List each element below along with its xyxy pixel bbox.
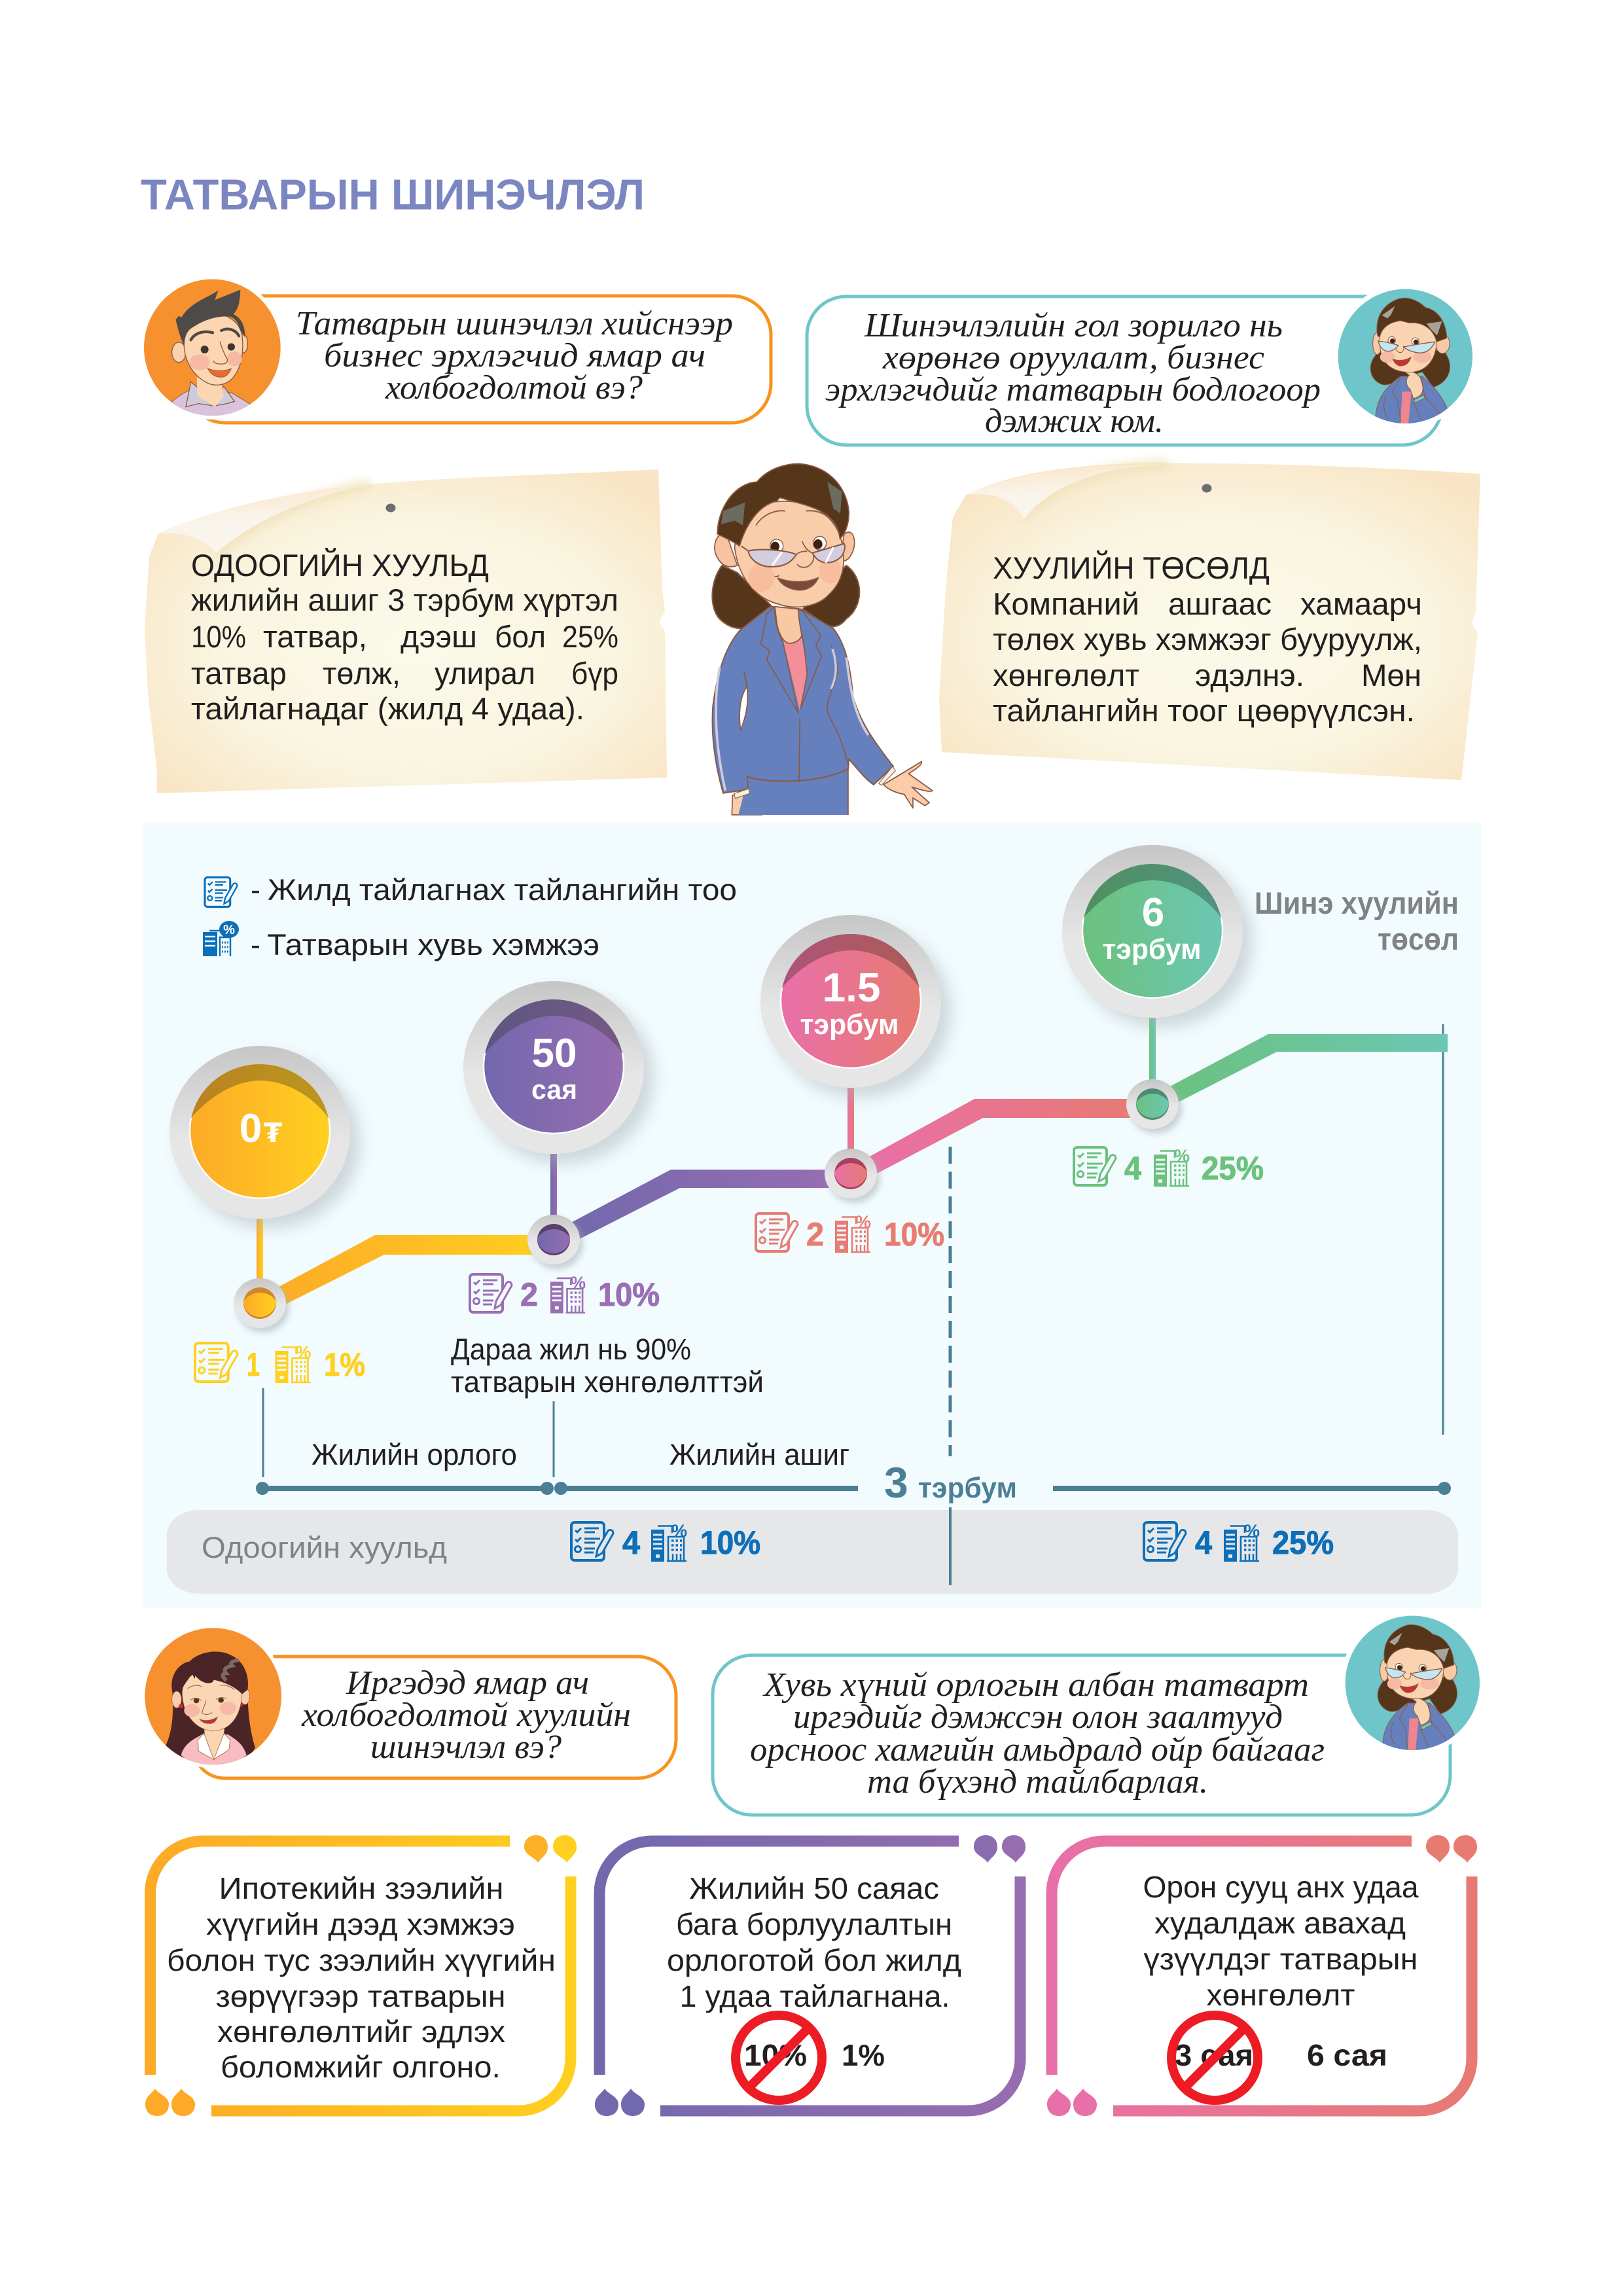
stats: current law left bbox=[571, 1521, 760, 1562]
panel: bill proposal note: Мөн bbox=[1361, 658, 1421, 692]
node: 1.5 billion: 1.5 bbox=[822, 965, 881, 1011]
node: 0 tugrik: 0 bbox=[240, 1106, 262, 1151]
bubble text: Шинэчлэлийн гол зорилго нь bbox=[864, 307, 1283, 344]
axis labels bbox=[312, 1438, 1017, 1507]
bubble text: бизнес эрхлэгчид ямар ач bbox=[324, 337, 705, 374]
stats: green: 4 bbox=[1124, 1150, 1141, 1187]
bubble text: хөрөнгө оруулалт, бизнес bbox=[882, 339, 1264, 376]
panel: current law note: бол bbox=[495, 619, 546, 654]
card: mortgage: боломжийг олгоно. bbox=[221, 2050, 501, 2084]
icon: man avatar bbox=[144, 279, 281, 420]
panel: current law note: бүр bbox=[571, 656, 618, 691]
node: 1.5 billion bbox=[760, 915, 951, 1152]
bubble text: орсноос хамгийн амьдралд ойр байгааг bbox=[750, 1731, 1325, 1768]
stats: pink bbox=[756, 1212, 944, 1253]
current law bar bbox=[167, 1510, 1458, 1594]
current law bar: Одоогийн хуульд bbox=[202, 1531, 447, 1564]
label: new bill: Шинэ хуулийн bbox=[1255, 886, 1459, 920]
legend: Жилд тайлагнах тайлангийн тоо bbox=[268, 873, 737, 906]
card: first home: худалдаж авахад bbox=[1154, 1906, 1406, 1940]
stats: current law right: 25% bbox=[1272, 1524, 1334, 1561]
stats: yellow: 1 bbox=[247, 1346, 260, 1383]
step line: yellow bbox=[262, 1235, 556, 1313]
panel: current law note: дээш bbox=[401, 619, 477, 654]
node: 50 million: 50 bbox=[532, 1031, 577, 1076]
stats: yellow bbox=[195, 1342, 365, 1383]
axis labels: Жилийн ашиг bbox=[669, 1438, 849, 1471]
axis lines bbox=[256, 1024, 1451, 1585]
panel: current law note: улирал bbox=[435, 656, 535, 691]
panel: income timeline chart bbox=[143, 823, 1481, 1608]
node: 1.5 billion: тэрбум bbox=[800, 1009, 899, 1041]
stats: current law right: 4 bbox=[1195, 1524, 1212, 1561]
bubble text: иргэдийг дэмжсэн олон заалтууд bbox=[793, 1698, 1283, 1736]
card: first home: Орон сууц анх удаа bbox=[1143, 1870, 1419, 1904]
card: small business: бага борлуулалтын bbox=[676, 1907, 952, 1941]
node dot: yellow bbox=[234, 1278, 289, 1333]
axis labels: Жилийн орлого bbox=[312, 1438, 517, 1471]
icon: woman avatar bbox=[141, 1624, 285, 1768]
bubble text: та бүхэнд тайлбарлая. bbox=[867, 1763, 1208, 1801]
stats: pink: 10% bbox=[884, 1216, 944, 1253]
axis labels: тэрбум bbox=[918, 1472, 1017, 1504]
node: 50 million bbox=[463, 981, 654, 1217]
icon: crossed out bbox=[1171, 2015, 1258, 2100]
bubble text: холбогдолтой хуулийн bbox=[301, 1696, 631, 1734]
panel: bill proposal note: тайлангийн тоог цөөрүүлсэн. bbox=[993, 693, 1415, 728]
label: new bill: төсөл bbox=[1378, 922, 1459, 956]
panel: bill proposal note: ашгаас bbox=[1168, 586, 1272, 621]
panel: current law note: 25% bbox=[562, 619, 618, 654]
bubble text bbox=[750, 1666, 1325, 1801]
stats: current law left: 4 bbox=[622, 1524, 640, 1561]
panel: current law note: татвар bbox=[191, 656, 287, 691]
panel: current law note: татвар, bbox=[263, 619, 367, 654]
card: small business: Жилийн 50 саяас bbox=[689, 1871, 939, 1905]
panel: current law note: ОДООГИЙН ХУУЛЬД bbox=[191, 548, 489, 583]
card: first home: үзүүлдэг татварын bbox=[1144, 1942, 1418, 1976]
bubble text: дэмжих юм. bbox=[985, 403, 1164, 440]
node: 6 billion: тэрбум bbox=[1102, 933, 1202, 965]
bubble text: Иргэдэд ямар ач bbox=[346, 1664, 589, 1702]
bubble text bbox=[296, 305, 733, 406]
bubble text bbox=[301, 1664, 631, 1766]
card: first home: хөнгөлөлт bbox=[1207, 1978, 1355, 2012]
panel: bill proposal note: хөнгөлөлт bbox=[993, 658, 1139, 692]
card: first home: 6 сая bbox=[1307, 2038, 1387, 2072]
stats: green: 25% bbox=[1202, 1150, 1264, 1187]
card: first home: 3 сая bbox=[1175, 2038, 1253, 2072]
note: next year discount: татварын хөнгөлөлттэй bbox=[451, 1365, 764, 1399]
card: mortgage: болон тус зээлийн хүүгийн bbox=[167, 1943, 556, 1977]
legend: - bbox=[251, 928, 260, 961]
panel: current law note: 10% bbox=[191, 619, 246, 654]
panel: bill proposal note: Компаний bbox=[993, 586, 1139, 621]
node: 0 tugrik: ₮ bbox=[264, 1117, 283, 1149]
step line: pink bbox=[854, 1099, 1135, 1182]
step line: green bbox=[1155, 1034, 1448, 1111]
illustration: teacher bbox=[712, 463, 933, 815]
axis labels: 3 bbox=[884, 1458, 908, 1507]
panel: bill proposal note bbox=[939, 463, 1480, 780]
panel: bill proposal note: ХУУЛИЙН ТӨСӨЛД bbox=[993, 550, 1270, 585]
bubble text: Татварын шинэчлэл хийснээр bbox=[296, 305, 733, 342]
legend: - bbox=[251, 873, 260, 906]
panel: current law note: жилийн ашиг 3 тэрбум хүртэл bbox=[191, 583, 618, 617]
card: mortgage: Ипотекийн зээлийн bbox=[219, 1871, 504, 1905]
bubble text bbox=[825, 307, 1321, 440]
node dot: purple bbox=[527, 1215, 583, 1269]
panel: bill proposal note: төлөх хувь хэмжээг бууруулж, bbox=[993, 622, 1422, 656]
speech bubble: business question bbox=[140, 276, 771, 427]
icon: teacher avatar bbox=[1333, 284, 1477, 428]
stats: pink: 2 bbox=[806, 1216, 824, 1253]
speech bubble: reform goal bbox=[807, 284, 1477, 445]
card: small business: орлоготой бол жилд bbox=[667, 1943, 961, 1977]
node: 6 billion bbox=[1062, 845, 1253, 1083]
stats: purple: 2 bbox=[520, 1276, 538, 1313]
speech bubble: citizens question bbox=[141, 1624, 676, 1778]
panel: current law note: төлж, bbox=[323, 656, 401, 691]
stats: purple bbox=[470, 1273, 660, 1313]
panel: bill proposal note: хамаарч bbox=[1300, 586, 1422, 621]
node: 6 billion: 6 bbox=[1142, 890, 1164, 935]
title: ТАТВАРЫН ШИНЭЧЛЭЛ bbox=[141, 170, 645, 219]
node dot: green bbox=[1126, 1079, 1182, 1134]
card: small business bbox=[595, 1835, 1026, 2116]
card: first home bbox=[1047, 1835, 1477, 2116]
card: small business: 1 удаа тайлагнана. bbox=[679, 1979, 950, 2013]
icon: teacher avatar bbox=[1340, 1611, 1484, 1755]
icon: crossed out bbox=[736, 2015, 822, 2100]
card: small business: 1% bbox=[842, 2038, 885, 2072]
node: 50 million: сая bbox=[531, 1074, 577, 1105]
legend: % bbox=[223, 923, 235, 937]
stats: green bbox=[1074, 1146, 1264, 1187]
bubble text: Хувь хүний орлогын албан татварт bbox=[762, 1666, 1309, 1704]
panel: current law note: тайлагнадаг (жилд 4 удаа). bbox=[191, 691, 584, 726]
stats: yellow: 1% bbox=[324, 1346, 365, 1383]
note: next year discount bbox=[451, 1333, 764, 1399]
bubble text: шинэчлэл вэ? bbox=[370, 1729, 562, 1766]
stats: purple: 10% bbox=[598, 1276, 660, 1313]
stats: current law left: 10% bbox=[700, 1524, 760, 1561]
node dot: pink bbox=[825, 1149, 880, 1203]
card: small business: 10% bbox=[744, 2038, 807, 2072]
panel: bill proposal note: эдэлнэ. bbox=[1195, 658, 1304, 692]
legend bbox=[203, 873, 737, 961]
speech bubble: income tax explanation bbox=[713, 1611, 1484, 1815]
label: new bill bbox=[1255, 886, 1459, 956]
bubble text: эрхлэгчдийг татварын бодлогоор bbox=[825, 371, 1321, 408]
step line: purple bbox=[556, 1170, 834, 1247]
card: mortgage: зөрүүгээр татварын bbox=[216, 1979, 505, 2013]
card: mortgage: хүүгийн дээд хэмжээ bbox=[206, 1907, 515, 1941]
card: mortgage bbox=[145, 1835, 577, 2116]
bubble text: холбогдолтой вэ? bbox=[385, 369, 643, 406]
panel: current law note bbox=[145, 469, 667, 793]
card: mortgage: хөнгөлөлтийг эдлэх bbox=[217, 2015, 505, 2049]
legend: Татварын хувь хэмжээ bbox=[267, 928, 599, 961]
note: next year discount: Дараа жил нь 90% bbox=[451, 1333, 691, 1366]
stats: current law right bbox=[1144, 1521, 1334, 1562]
node: 0 tugrik bbox=[169, 1046, 360, 1280]
